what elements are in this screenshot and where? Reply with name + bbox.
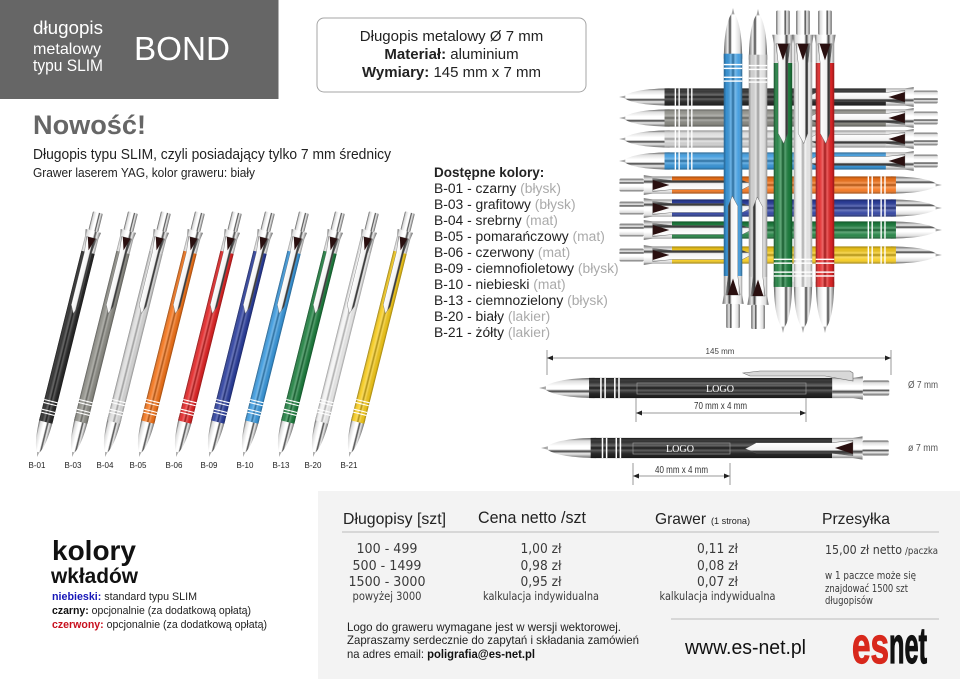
available colours list: B-21 - żółty (lakier) (434, 324, 550, 340)
shipping column: 15,00 zł netto (825, 543, 902, 557)
table headings (343, 509, 890, 528)
available colours list: B-13 - ciemnozielony (błysk) (434, 292, 608, 308)
specification box: Długopis metalowy Ø 7 mm (360, 28, 543, 45)
colour code labels (29, 461, 358, 470)
available colours list (434, 165, 619, 340)
price column (483, 541, 599, 603)
engraving column: 0,11 zł (697, 541, 738, 557)
description: Długopis typu SLIM, czyli posiadający tylko 7 mm średnicy (33, 147, 392, 163)
available colours list: B-20 - biały (lakier) (434, 308, 550, 324)
diameter label top: Ø 7 mm (908, 380, 938, 391)
quantity column: 1500 - 3000 (348, 574, 426, 590)
dimension: 40 mm engraving area: 40 mm x 4 mm (655, 465, 708, 476)
colour code labels: B-06 (166, 461, 183, 470)
refill colours: czerwony: opcjonalnie (za dodatkową opłatą) (52, 619, 267, 631)
shipping column (825, 543, 938, 607)
engraving column: kalkulacja indywidualna (660, 589, 776, 603)
headline: Nowość! (33, 109, 146, 140)
esnet logo: es (852, 617, 889, 674)
price column: 0,98 zł (520, 558, 562, 574)
colour code labels: B-04 (97, 461, 114, 470)
table headings: Cena netto /szt (478, 509, 586, 527)
diagonal pens in all colours (29, 211, 418, 459)
website: www.es-net.pl (684, 637, 806, 659)
colour code labels: B-05 (130, 461, 147, 470)
colour code labels: B-13 (273, 461, 290, 470)
available colours list: B-10 - niebieski (mat) (434, 276, 566, 292)
contact note (347, 620, 639, 661)
description: Grawer laserem YAG, kolor graweru: biały (33, 166, 256, 180)
colour code labels: B-21 (341, 461, 358, 470)
front view pen with clip (541, 436, 889, 460)
refill colours (50, 535, 267, 631)
refill colours: czarny: opcjonalnie (za dodatkową opłatą) (52, 605, 251, 617)
product name: BOND (134, 31, 230, 68)
refill colours: niebieski: standard typu SLIM (52, 591, 197, 603)
shipping column: /paczka (905, 546, 938, 557)
colour code labels: B-20 (305, 461, 322, 470)
available colours list: B-01 - czarny (błysk) (434, 180, 561, 196)
refill colours: wkładów (50, 565, 139, 588)
diameter label bottom: ø 7 mm (908, 443, 938, 454)
available colours list: B-05 - pomarańczowy (mat) (434, 228, 605, 244)
refill colours: kolory (52, 535, 136, 566)
dimension: 70 mm engraving area: 70 mm x 4 mm (694, 401, 747, 412)
table headings: Grawer (655, 511, 707, 528)
engraving column: 0,08 zł (697, 558, 738, 574)
available colours list: B-06 - czerwony (mat) (434, 244, 570, 260)
price column: kalkulacja indywidualna (483, 589, 599, 603)
specification box: Materiał: aluminium (384, 46, 519, 63)
quantity column: powyżej 3000 (352, 589, 422, 603)
shipping column: znajdować 1500 szt (825, 583, 908, 595)
quantity column: 100 - 499 (356, 541, 418, 557)
contact note: Zapraszamy serdecznie do zapytań i składania zamówień (347, 633, 639, 647)
contact note: Logo do graweru wymagane jest w wersji wektorowej. (347, 620, 621, 634)
shipping column: długopisów (825, 595, 873, 607)
price column: 0,95 zł (520, 574, 562, 590)
product type (33, 17, 103, 75)
product type: metalowy (33, 40, 102, 58)
header block (0, 0, 278, 99)
crossed pens arrangement (619, 8, 942, 333)
available colours list: Dostępne kolory: (434, 165, 544, 180)
price column: 1,00 zł (520, 541, 562, 557)
side view pen with clip (539, 371, 889, 400)
quantity column (348, 541, 426, 603)
front view pen with clip: LOGO (666, 443, 694, 455)
colour code labels: B-09 (201, 461, 218, 470)
table headings: (1 strona) (711, 516, 750, 527)
engraving column: 0,07 zł (697, 574, 738, 590)
description (33, 147, 392, 180)
product type: długopis (33, 17, 103, 38)
colour code labels: B-03 (65, 461, 82, 470)
engraving column (660, 541, 776, 603)
available colours list: B-04 - srebrny (mat) (434, 212, 558, 228)
shipping column: w 1 paczce może się (825, 570, 916, 582)
colour code labels: B-01 (29, 461, 46, 470)
side view pen with clip: LOGO (706, 383, 734, 395)
available colours list: B-09 - ciemnofioletowy (błysk) (434, 260, 619, 276)
dimension: 70 mm engraving area (636, 398, 806, 422)
available colours list: B-03 - grafitowy (błysk) (434, 196, 576, 212)
quantity column: 500 - 1499 (352, 558, 422, 574)
specification box (317, 18, 586, 92)
contact note: na adres email: poligrafia@es-net.pl (347, 647, 535, 661)
specification box: Wymiary: 145 mm x 7 mm (362, 64, 541, 81)
table headings: Przesyłka (822, 511, 890, 528)
dimension: 40 mm engraving area (633, 463, 730, 485)
product type: typu SLIM (33, 57, 103, 75)
pricing panel (318, 491, 960, 679)
colour code labels: B-10 (237, 461, 254, 470)
dimension: pen length (547, 347, 891, 375)
dimension: pen length: 145 mm (706, 347, 735, 356)
table headings: Długopisy [szt] (343, 511, 446, 528)
